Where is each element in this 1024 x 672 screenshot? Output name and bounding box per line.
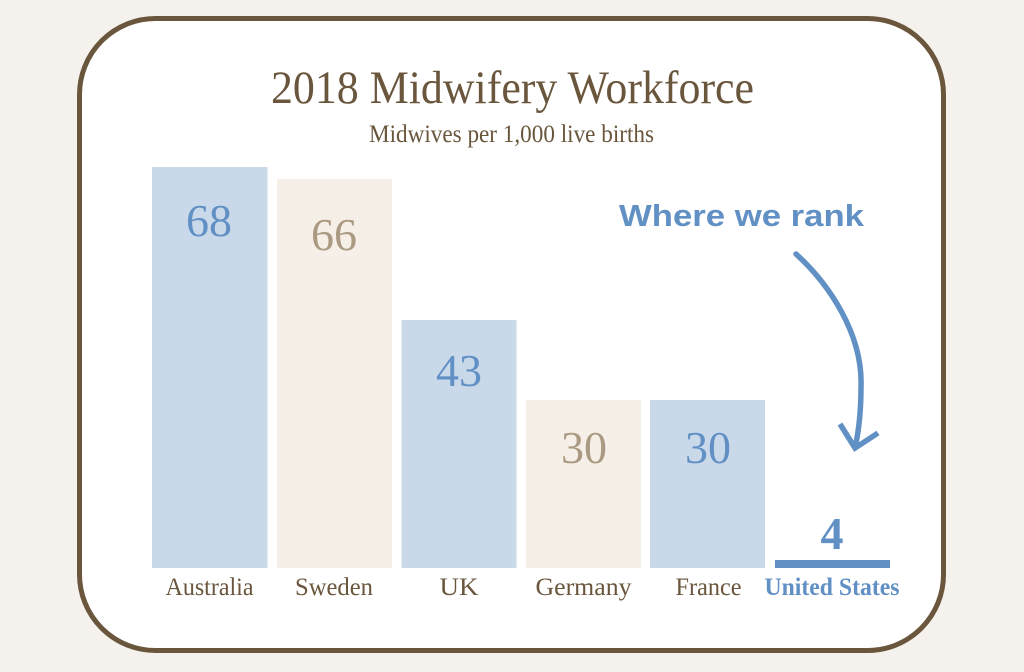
- bar: Australia: [152, 167, 268, 568]
- callout: where we rank: Where we rank: [619, 198, 865, 233]
- label: Germany: Germany: [536, 574, 632, 601]
- title: 2018 Midwifery Workforce: [271, 62, 754, 114]
- label: UK: UK: [440, 574, 478, 601]
- bar chart: [152, 167, 900, 601]
- label: Australia: Australia: [166, 574, 254, 601]
- bar: United States: [775, 508, 890, 568]
- bar: France: 30: [685, 422, 731, 473]
- bar: UK: [402, 320, 516, 568]
- bar: United States: 4: [820, 508, 844, 559]
- bar: France: [650, 400, 765, 568]
- label: France: France: [676, 574, 742, 601]
- label: Sweden: Sweden: [295, 574, 373, 601]
- subtitle: Midwives per 1,000 live births: [369, 121, 654, 148]
- bar: Germany: [526, 400, 641, 568]
- bar: UK: 43: [436, 345, 482, 396]
- bar: Germany: 30: [561, 422, 607, 473]
- label: United States: United States: [764, 574, 900, 601]
- arrow: pointing to United States: [796, 254, 878, 448]
- bar: Sweden: 66: [311, 209, 357, 260]
- panel: chart card: [80, 18, 944, 650]
- bar: Sweden: [277, 179, 392, 568]
- bar: Australia: 68: [186, 195, 232, 246]
